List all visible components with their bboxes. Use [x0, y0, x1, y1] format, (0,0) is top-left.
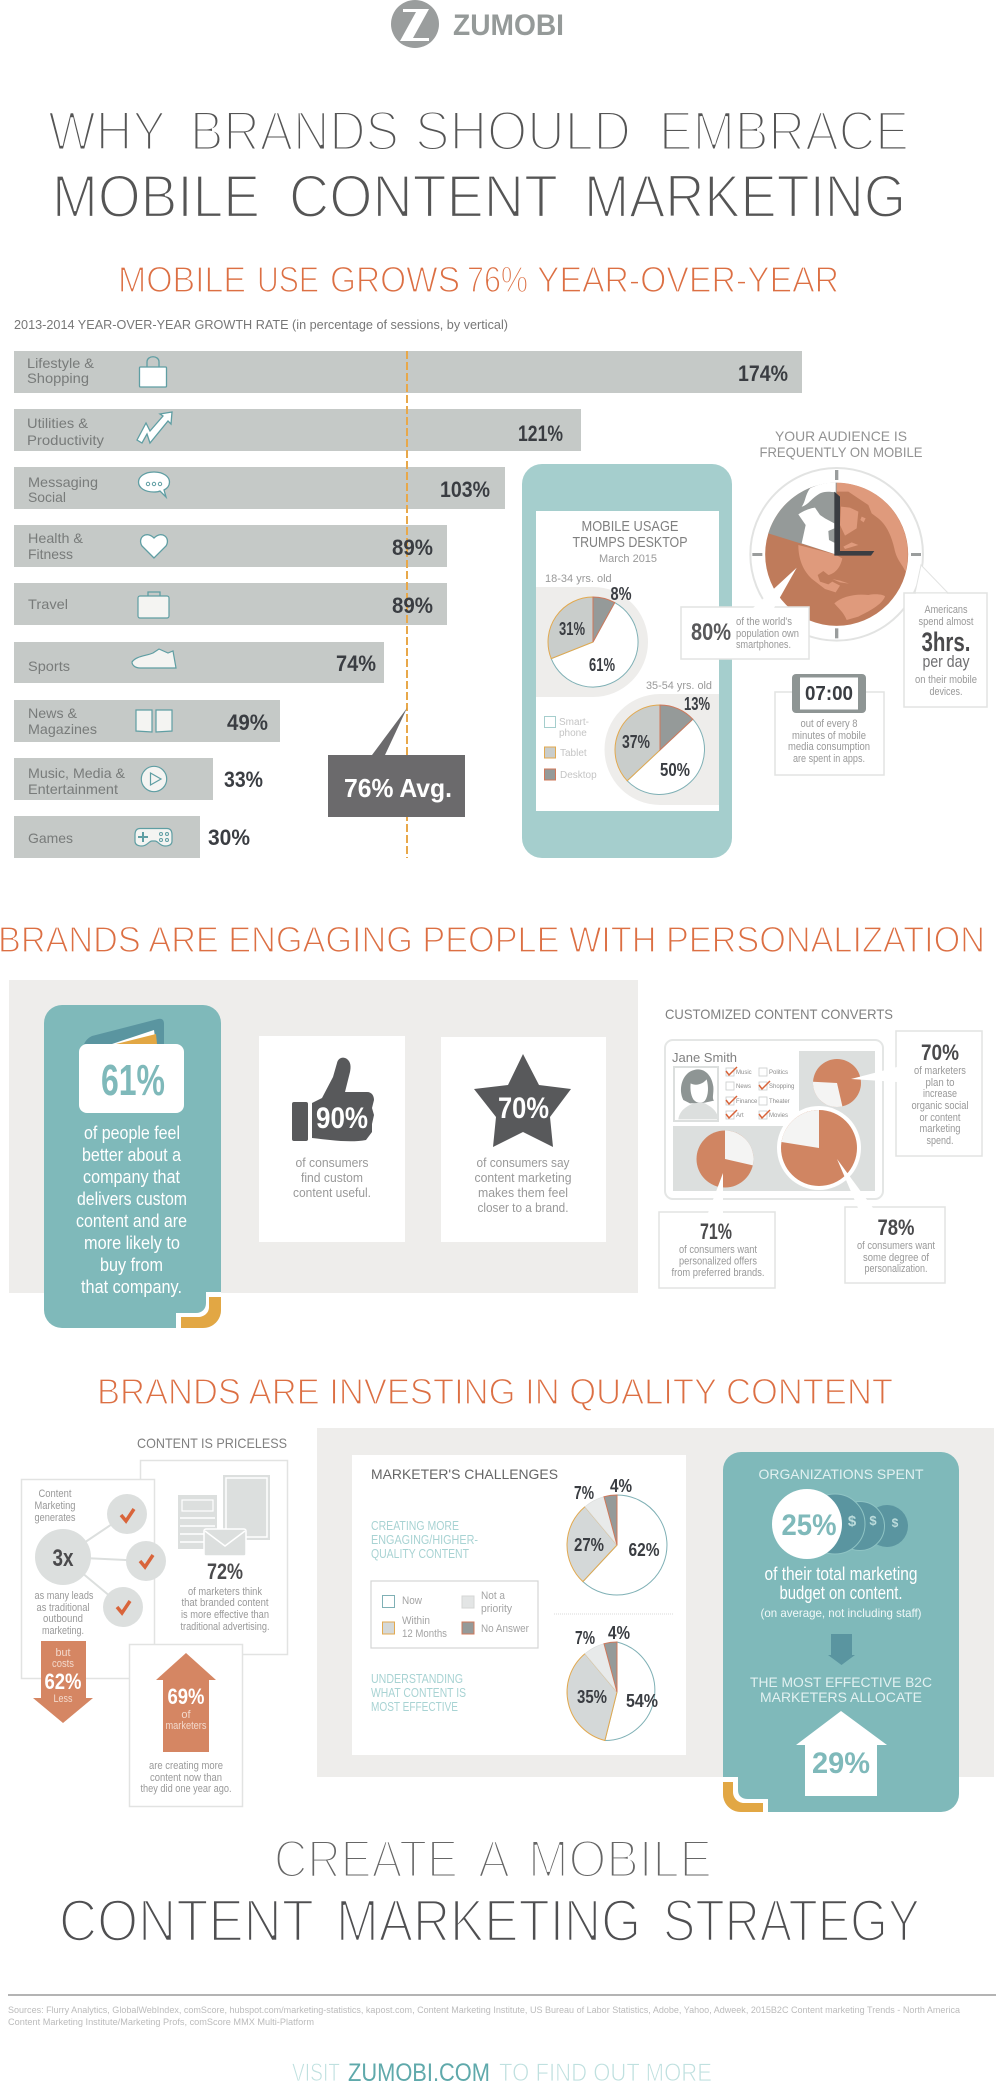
logo: Zumobi: ZUMOBI [453, 9, 564, 42]
panel: 3x leads: outbound [43, 1613, 83, 1625]
callout: 70% marketers: 70% [921, 1040, 959, 1065]
bar chart: growth rate by vertical: Travel [28, 596, 68, 612]
closing title: A [478, 1830, 511, 1889]
legend: priority: No Answer [481, 1623, 529, 1635]
panel: marketer's challenges: UNDERSTANDING [371, 1672, 463, 1686]
heading: mobile use grows: YEAR-OVER-YEAR [537, 259, 839, 300]
closing title: CREATE [274, 1830, 458, 1889]
arrow: up 69%: of [181, 1709, 192, 1721]
pie chart: 35-54: 37% [622, 732, 650, 752]
bar chart: growth rate by vertical: Lifestyle & [27, 355, 95, 371]
callout: 3 hours per day [904, 565, 987, 707]
panel: 61% teal card [44, 1005, 221, 1328]
icon: profile portrait [674, 1067, 718, 1121]
icon: star [474, 1054, 571, 1147]
pie chart: engaging content [567, 1476, 667, 1595]
pie chart: engaging content: 27% [574, 1535, 604, 1555]
bar chart: growth rate by vertical: 89% [392, 593, 433, 618]
callout: 3 hours per day: devices. [930, 686, 962, 698]
callout: 3 hours per day: on their mobile [915, 674, 977, 686]
checklist: interests: Shopping [769, 1084, 794, 1090]
panel: 69% marketers: content now than [150, 1772, 222, 1784]
panel: 70% card: of consumers say [476, 1156, 570, 1170]
callout: 70% marketers [851, 1031, 982, 1156]
callout: 70% marketers: plan to [926, 1077, 954, 1089]
callout: 71% consumers: of consumers want [679, 1244, 757, 1256]
heading: your audience: FREQUENTLY ON MOBILE [760, 444, 922, 460]
callout: 07:00 in apps [775, 674, 884, 775]
bar chart: growth rate by vertical: Magazines [28, 721, 97, 737]
panel: marketer's challenges: CREATING MORE [371, 1519, 459, 1533]
panel: phone mobile usage: MOBILE USAGE [582, 519, 679, 535]
icon: check circles [103, 1494, 166, 1627]
panel: organizations spent: ORGANIZATIONS SPENT [758, 1466, 924, 1482]
title: SHOULD [415, 99, 631, 162]
arrow: costs 62% less: but [56, 1647, 70, 1659]
callout: 3 hours per day: Americans [924, 604, 968, 616]
panel: marketer's challenges [352, 1455, 686, 1755]
icon: page corner [723, 1777, 768, 1812]
panel: 72% branded content: of marketers think [188, 1586, 262, 1598]
panel: marketer's challenges: MARKETER'S CHALLENGES [371, 1466, 558, 1482]
panel: phone mobile usage: TRUMPS DESKTOP [572, 535, 688, 551]
closing title: STRATEGY [663, 1888, 920, 1954]
logo: Zumobi [391, 0, 564, 48]
panel: 90% card: of consumers [296, 1156, 368, 1170]
panel: 69% marketers: are creating more [149, 1760, 223, 1772]
pie chart: engaging content: 4% [610, 1476, 632, 1496]
callout: 78% consumers [837, 1159, 945, 1283]
bar chart: growth rate by vertical: Entertainment [28, 781, 118, 797]
bar chart: growth rate by vertical: Games [28, 830, 73, 846]
bar chart: growth rate by vertical: 74% [336, 651, 376, 676]
bar chart: growth rate by vertical: News & [28, 705, 78, 721]
bar chart: growth rate by vertical: Social [28, 489, 66, 505]
callout: 70% marketers: marketing [920, 1123, 960, 1135]
callout: 71% consumers: from preferred brands. [672, 1267, 764, 1279]
sources: Sources: Flurry Analytics, GlobalWebIndex, comScore, hubspot.com/marketing-statistics, kapost.com, Content Marketing Institute, US Bureau of Labor Statistics, Adobe, Yahoo, Adweek, 2015B2C Content marketing Trends - North America [8, 2005, 960, 2015]
title: MARKETING [584, 163, 906, 230]
panel: organizations spent: MARKETERS ALLOCATE [760, 1689, 922, 1705]
icon: coins: $ [869, 1513, 877, 1528]
closing title [59, 1830, 920, 1954]
panel: 61% teal card: delivers custom [77, 1189, 187, 1209]
panel: organizations spent: of their total marketing [764, 1564, 918, 1584]
callout: 71% consumers: personalized offers [679, 1256, 757, 1268]
callout: 76% average: 76% Avg. [344, 773, 452, 803]
panel: 72% branded content: 72% [207, 1559, 243, 1584]
icon: star: 70% [498, 1092, 549, 1125]
checklist: interests [726, 1067, 794, 1119]
checklist: interests: Finance [736, 1099, 758, 1105]
panel: 70% card: content marketing [474, 1171, 572, 1185]
bar chart: growth rate by vertical: Shopping [27, 370, 89, 386]
pie chart: effective content: 35% [577, 1687, 607, 1707]
panel: 3x leads: as many leads [34, 1590, 94, 1602]
legend: priority: Not a [481, 1590, 506, 1602]
pie chart: effective content: 4% [608, 1623, 630, 1643]
title: MOBILE [52, 163, 260, 230]
bar chart: growth rate by vertical: 121% [518, 421, 563, 446]
heading: mobile use grows [118, 259, 839, 300]
bar chart: growth rate by vertical: Fitness [28, 546, 73, 562]
panel: 72% branded content: that branded content [182, 1597, 268, 1609]
bar chart: growth rate by vertical: 49% [227, 710, 268, 735]
pie chart: 18-34: 61% [589, 655, 615, 675]
icon: house 29%: 29% [812, 1747, 870, 1780]
heading: content is priceless: CONTENT IS PRICELESS [137, 1435, 287, 1451]
checklist: interests: Movies [769, 1113, 788, 1119]
call to action: ZUMOBI.COM [348, 2059, 490, 2087]
callout: 70% marketers: organic social [912, 1100, 968, 1112]
panel: 61% teal card: buy from [100, 1255, 163, 1275]
callout: 78% consumers: 78% [878, 1215, 914, 1240]
pie chart: 78% [781, 1110, 857, 1186]
callout: 3 hours per day: 3hrs. [922, 627, 970, 657]
callout: 70% marketers: or content [920, 1112, 960, 1124]
panel: 61% teal card: of people feel [84, 1123, 180, 1143]
icon: heart [141, 535, 167, 558]
pie chart: 18-34: 31% [559, 619, 585, 639]
heading: mobile use grows: USE [257, 259, 319, 300]
bar chart: growth rate by vertical: 89% [392, 535, 433, 560]
panel: 61% teal card: company that [83, 1167, 180, 1187]
closing title: MOBILE [528, 1830, 712, 1889]
callout: 80% smartphones: population own [736, 628, 799, 640]
panel: 90% card: find custom [301, 1171, 363, 1185]
panel: 69% marketers [130, 1644, 242, 1806]
bar chart: growth rate by vertical: 30% [208, 825, 250, 850]
icon: coins: $ [892, 1516, 899, 1530]
panel: tablet profile [665, 1040, 883, 1199]
callout: 70% marketers: increase [923, 1088, 957, 1100]
panel: 3x leads [22, 1480, 166, 1723]
icon: page corner [176, 1292, 221, 1328]
panel: 72% branded content: traditional advertising. [180, 1621, 270, 1633]
icon: wallet [84, 1019, 164, 1044]
panel: 70% card: closer to a brand. [478, 1201, 568, 1215]
panel: grey personalization background [9, 980, 638, 1293]
arrow: costs 62% less [33, 1641, 93, 1723]
checklist: interests: News [736, 1084, 751, 1090]
arrow: up 69% [156, 1653, 216, 1752]
sources [8, 1994, 996, 2027]
heading: your audience: YOUR AUDIENCE IS [775, 428, 907, 444]
panel: 72% branded content: is more effective than [181, 1609, 269, 1621]
icon: globe clock [750, 468, 923, 641]
panel: phone mobile usage: March 2015 [599, 553, 657, 565]
pie chart: effective content: 7% [575, 1628, 595, 1648]
call to action: TO FIND OUT MORE [499, 2059, 712, 2087]
legend: priority: Within [402, 1615, 430, 1627]
callout: 07:00 in apps: minutes of mobile [792, 730, 866, 742]
pie chart: engaging content: 7% [574, 1483, 594, 1503]
icon: shopping bag [140, 357, 166, 387]
arrow: costs 62% less: 62% [44, 1669, 82, 1694]
heading: mobile use grows: MOBILE [118, 259, 246, 300]
icon: open book [136, 710, 172, 732]
sources: Content Marketing Institute/Marketing Profs, comScore MMX Multi-Platform [8, 2017, 314, 2027]
callout: 80% smartphones [681, 568, 809, 659]
bar chart: growth rate by vertical: Sports [28, 658, 70, 674]
bar chart: growth rate by vertical: Utilities & [27, 415, 89, 431]
legend: priority [371, 1581, 538, 1648]
icon: house 29% [796, 1711, 887, 1796]
checklist: interests: Art [736, 1113, 744, 1119]
panel: 3x leads: Marketing [34, 1500, 76, 1512]
pie chart: 35-54 [615, 694, 710, 794]
panel: 61% teal card: better about a [82, 1145, 182, 1165]
icon: game controller [135, 828, 172, 846]
arrow: costs 62% less: costs [52, 1658, 74, 1670]
legend: priority: priority [481, 1603, 512, 1615]
title: EMBRACE [659, 99, 909, 162]
arrow: up 69%: marketers [166, 1720, 207, 1732]
legend: device types: phone [559, 728, 587, 739]
panel: marketer's challenges: MOST EFFECTIVE [371, 1700, 458, 1714]
legend: device types: Tablet [560, 748, 587, 759]
icon: documents and envelope [178, 1475, 270, 1556]
panel: 70% card [441, 1037, 606, 1242]
heading: your audience [760, 428, 922, 460]
pie chart: 18-34: 8% [610, 584, 632, 604]
callout: 70% marketers: of marketers [914, 1065, 966, 1077]
bar chart: growth rate by vertical: 174% [738, 361, 788, 386]
icon: sneaker [132, 649, 176, 668]
callout: 78% consumers: some degree of [863, 1252, 930, 1264]
arrow: costs 62% less: Less [54, 1693, 73, 1705]
heading: mobile use grows: GROWS [330, 259, 460, 300]
heading: investing in quality content: BRANDS ARE INVESTING IN QUALITY CONTENT [97, 1371, 893, 1412]
panel: phone mobile usage: 35-54 yrs. old [646, 680, 712, 692]
bar chart: growth rate by vertical: Productivity [27, 432, 104, 448]
pie chart: 35-54: 13% [684, 694, 710, 714]
title: BRANDS [190, 99, 399, 162]
bar chart: growth rate by vertical: Music, Media & [28, 765, 126, 781]
arrow: down [828, 1634, 855, 1665]
panel: 70% card: makes them feel [478, 1186, 568, 1200]
pie chart: 35-54: 50% [660, 760, 690, 780]
legend: device types: Desktop [560, 770, 597, 781]
heading: customized content converts: CUSTOMIZED CONTENT CONVERTS [665, 1006, 893, 1022]
call to action: VISIT [292, 2059, 340, 2087]
callout: 71% consumers: 71% [700, 1219, 732, 1244]
bar chart: growth rate by vertical [14, 318, 802, 858]
panel: organizations spent: THE MOST EFFECTIVE B2C [750, 1674, 932, 1690]
closing title: CONTENT [59, 1888, 314, 1954]
panel: phone mobile usage: 18-34 yrs. old [545, 573, 612, 585]
panel: 72% branded content [140, 1460, 288, 1654]
bar chart: growth rate by vertical: Health & [28, 530, 84, 546]
callout: 3 hours per day: per day [922, 652, 970, 671]
panel: organizations spent: budget on content. [780, 1583, 902, 1603]
pie chart: engaging content: 62% [628, 1540, 660, 1560]
callout: 80% smartphones: smartphones. [736, 639, 791, 651]
title: CONTENT [289, 163, 558, 230]
pie chart: 71% [696, 1130, 754, 1188]
panel: marketer's challenges: ENGAGING/HIGHER- [371, 1533, 478, 1547]
title: WHY [48, 99, 166, 162]
callout: 07:00 in apps: 07:00 [805, 683, 853, 705]
title [48, 99, 909, 230]
panel: 61% teal card: that company. [81, 1277, 182, 1297]
icon: growth arrow [137, 412, 172, 443]
panel: grey investing background [317, 1428, 994, 1777]
panel: 61% teal card: content and are [76, 1211, 187, 1231]
icon: coins [772, 1489, 908, 1559]
bar chart: growth rate by vertical: 103% [440, 477, 490, 502]
panel: 90% card [259, 1036, 405, 1242]
closing title: MARKETING [336, 1888, 641, 1954]
panel: 90% card: content useful. [293, 1186, 371, 1200]
callout: 07:00 in apps: out of every 8 [800, 718, 858, 730]
callout: 70% marketers: spend. [926, 1135, 954, 1147]
icon: play button [141, 766, 167, 792]
checklist: interests: Music [736, 1070, 752, 1076]
pie chart: 18-34 [548, 584, 638, 687]
checklist: interests: Theater [769, 1099, 790, 1105]
panel: 3x leads: generates [34, 1512, 76, 1524]
panel: 3x leads: 3x [52, 1545, 74, 1572]
panel: 61% teal card: 61% [101, 1056, 165, 1105]
callout: 07:00 in apps: are spent in apps. [793, 753, 865, 765]
panel: phone mobile usage [522, 464, 732, 858]
pie chart: effective content: 54% [626, 1691, 658, 1711]
panel: organizations spent [723, 1452, 959, 1812]
panel: 3x leads: marketing. [42, 1625, 84, 1637]
callout: 3 hours per day: spend almost [918, 616, 974, 628]
icon: thumbs up [292, 1058, 374, 1141]
heading: mobile use grows: 76% [467, 259, 528, 300]
panel: 69% marketers: they did one year ago. [140, 1783, 232, 1795]
panel: organizations spent: (on average, not including staff) [760, 1606, 922, 1620]
callout: 78% consumers: personalization. [864, 1263, 928, 1275]
panel: marketer's challenges: QUALITY CONTENT [371, 1547, 469, 1561]
legend: device types [544, 716, 597, 781]
callout: 80% smartphones: 80% [691, 619, 731, 646]
icon: coins: 25% [782, 1509, 836, 1542]
callout: 07:00 in apps: media consumption [788, 741, 870, 753]
legend: priority: Now [402, 1595, 422, 1607]
legend: device types: Smart- [559, 717, 589, 728]
bar chart: growth rate by vertical: 2013-2014 YEAR-OVER-YEAR GROWTH RATE (in percentage of sessions, by vertical) [14, 318, 508, 332]
panel: marketer's challenges: WHAT CONTENT IS [371, 1686, 466, 1700]
panel: 61% teal card: more likely to [84, 1233, 180, 1253]
pie chart: 70% [813, 1059, 861, 1107]
panel: 3x leads: as traditional [36, 1602, 90, 1614]
panel: 3x leads: Content [38, 1488, 72, 1500]
arrow: up 69%: 69% [168, 1684, 204, 1709]
icon: speech bubble [138, 472, 170, 497]
panel: tablet profile: Jane Smith [672, 1050, 737, 1065]
icon: coins: $ [848, 1513, 857, 1530]
checklist: interests: Politics [769, 1070, 788, 1076]
pie chart: effective content [567, 1623, 658, 1740]
bar chart: growth rate by vertical: Messaging [28, 474, 98, 490]
icon: thumbs up: 90% [316, 1102, 368, 1135]
callout: 80% smartphones: of the world's [736, 616, 792, 628]
callout: 76% average [328, 708, 465, 817]
icon: briefcase [138, 592, 169, 618]
callout: 78% consumers: of consumers want [857, 1240, 935, 1252]
callout: 71% consumers [659, 1173, 775, 1288]
legend: priority: 12 Months [402, 1628, 447, 1640]
call to action [292, 2059, 712, 2087]
bar chart: growth rate by vertical: 33% [224, 767, 263, 792]
